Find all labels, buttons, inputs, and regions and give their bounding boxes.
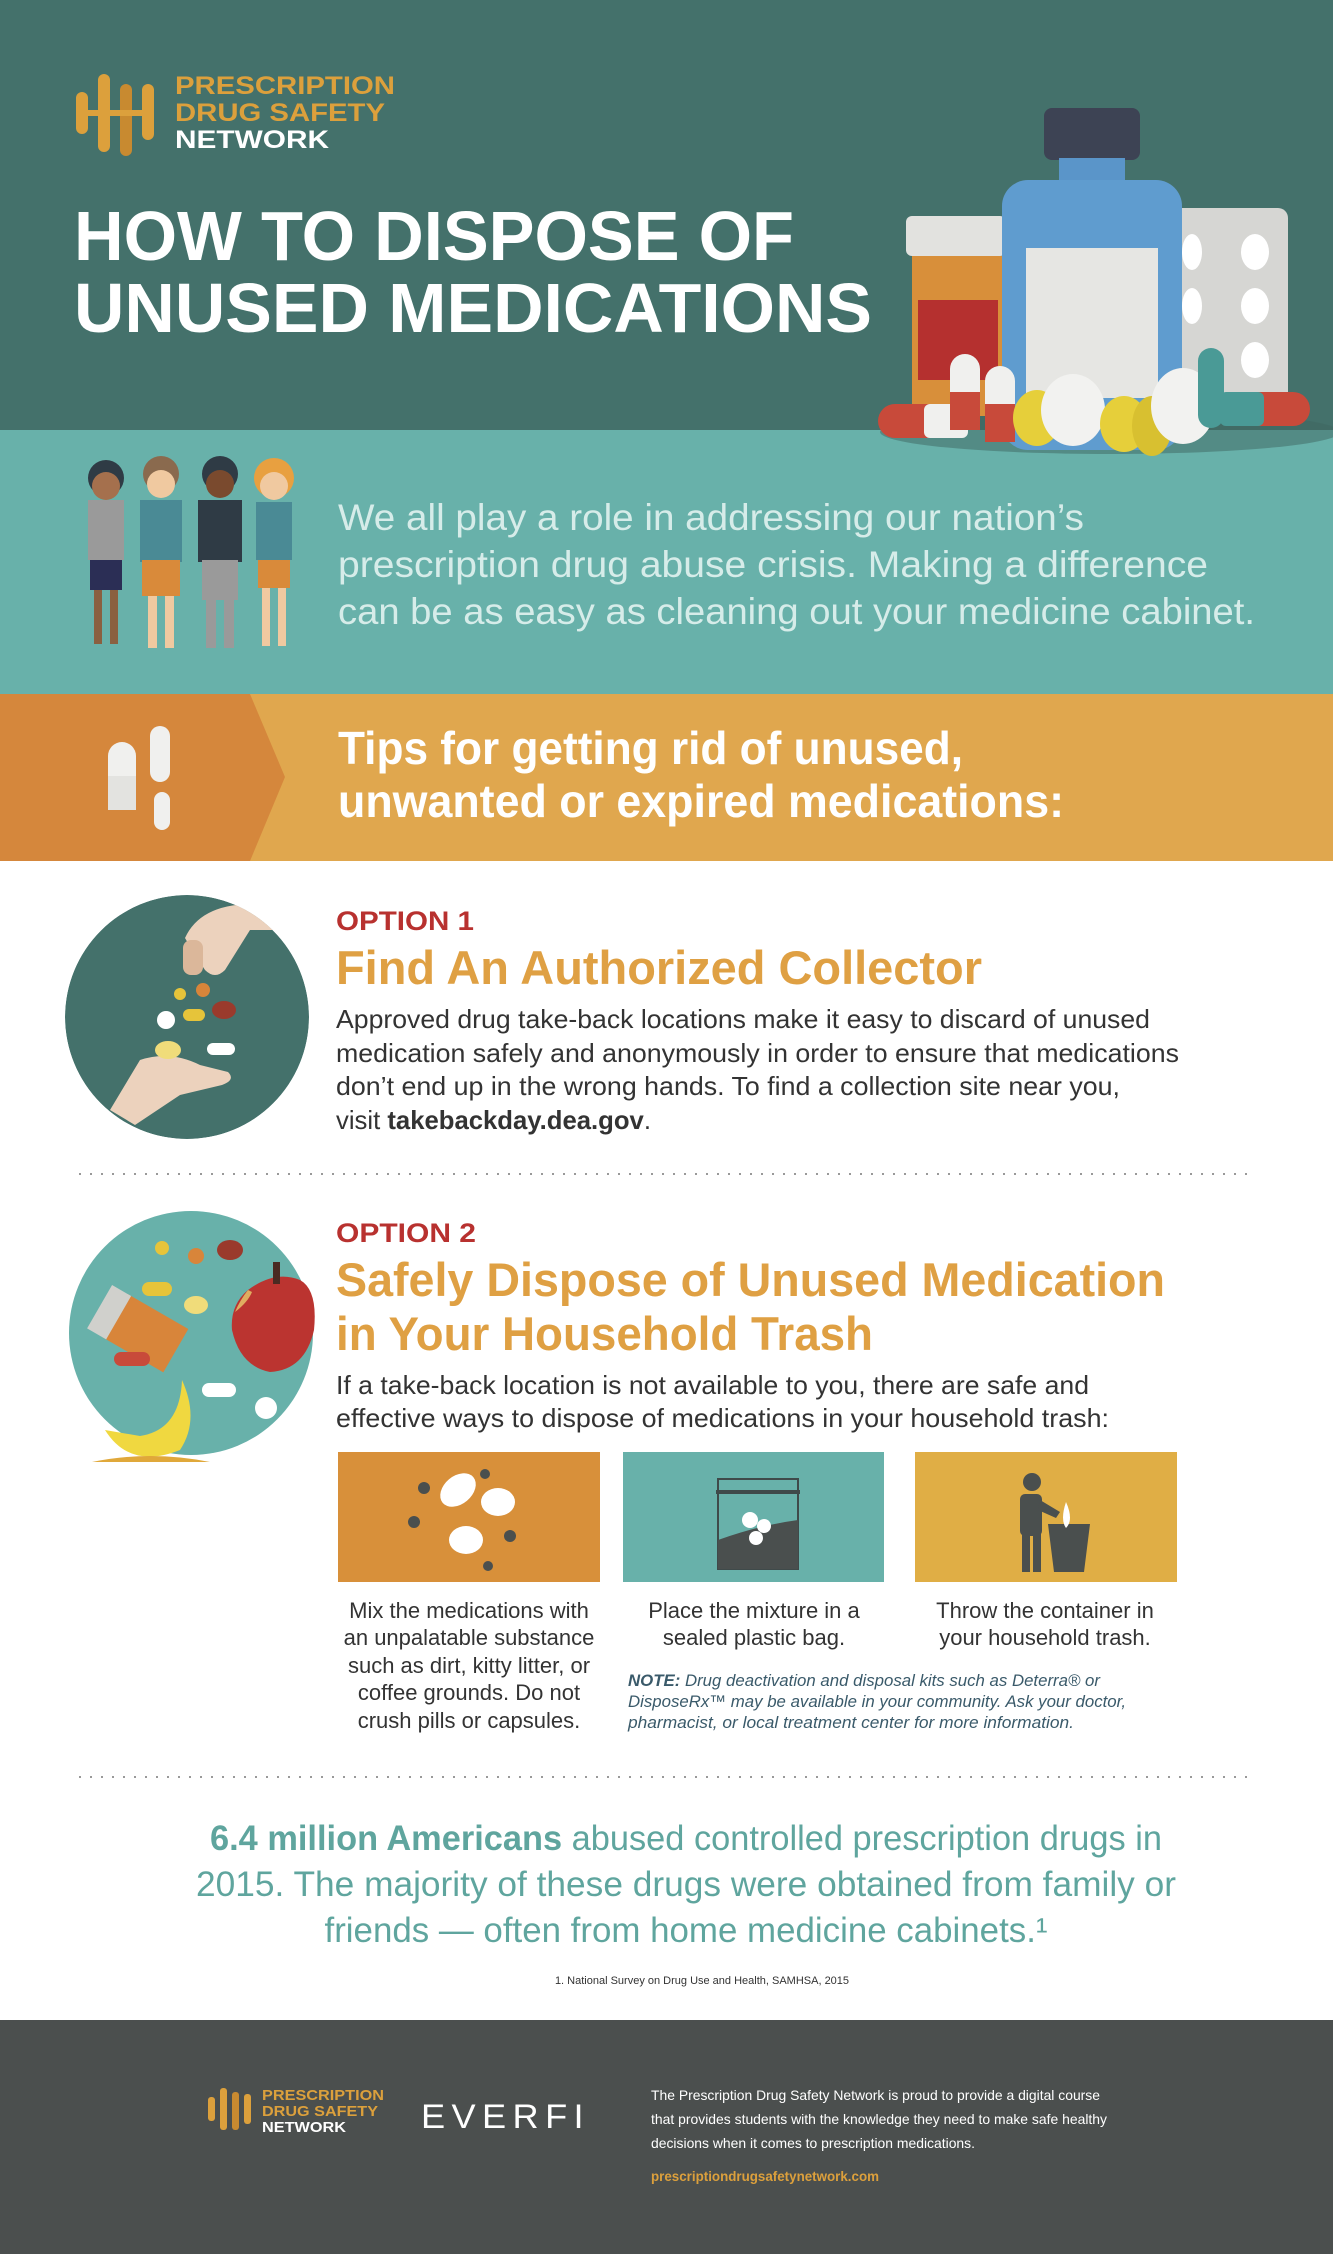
option 2 title: in Your Household Trash bbox=[336, 1307, 873, 1360]
statistic: 6.4 million Americans abused controlled prescription drugs in bbox=[210, 1819, 1162, 1858]
intro text: prescription drug abuse crisis. Making a difference bbox=[338, 544, 1208, 585]
footer logo: NETWORK bbox=[262, 2119, 346, 2136]
step 3: trash: Throw the container in bbox=[936, 1598, 1154, 1623]
title: HOW TO DISPOSE OF bbox=[74, 197, 794, 275]
option 1 body: medication safely and anonymously in order to ensure that medications bbox=[336, 1038, 1179, 1068]
icon: hands with pills bbox=[65, 895, 309, 1139]
option 1 body: don’t end up in the wrong hands. To find a collection site near you, bbox=[336, 1071, 1120, 1101]
step 1: mix: an unpalatable substance bbox=[344, 1625, 594, 1650]
logo: DRUG SAFETY bbox=[175, 99, 385, 127]
option 1 label: OPTION 1 bbox=[336, 906, 474, 936]
logo: NETWORK bbox=[175, 126, 329, 154]
note: NOTE: Drug deactivation and disposal kits such as Deterra® or bbox=[628, 1671, 1101, 1690]
option 1 title: Find An Authorized Collector bbox=[336, 941, 982, 994]
note: pharmacist, or local treatment center for more information. bbox=[627, 1713, 1074, 1732]
logo: PRESCRIPTION bbox=[175, 72, 395, 100]
option 1 body bbox=[336, 1004, 1179, 1135]
logo bbox=[76, 72, 395, 156]
step 1: mix: Mix the medications with bbox=[349, 1598, 589, 1623]
note bbox=[627, 1671, 1126, 1732]
option 2 body: effective ways to dispose of medications in your household trash: bbox=[336, 1403, 1109, 1433]
footer text: that provides students with the knowledge they need to make safe healthy bbox=[651, 2111, 1107, 2127]
footer logo: PRESCRIPTION bbox=[262, 2087, 384, 2104]
icon: trash items bbox=[69, 1211, 315, 1462]
statistic bbox=[196, 1819, 1176, 1950]
option 1 body: visit takebackday.dea.gov. bbox=[336, 1105, 651, 1135]
EVERFI logo: EVERFI bbox=[421, 2098, 590, 2136]
step 2: bag bbox=[623, 1452, 884, 1650]
tips heading: unwanted or expired medications: bbox=[338, 775, 1064, 827]
step 1: mix: crush pills or capsules. bbox=[358, 1708, 580, 1733]
note: DisposeRx™ may be available in your community. Ask your doctor, bbox=[628, 1692, 1126, 1711]
tips banner bbox=[0, 694, 1333, 861]
option 1 bbox=[65, 895, 1179, 1139]
tips heading bbox=[338, 722, 1064, 827]
footer bbox=[0, 2020, 1333, 2254]
statistic: 2015. The majority of these drugs were obtained from family or bbox=[196, 1865, 1176, 1904]
illustration: medications bbox=[878, 108, 1333, 456]
step 2: bag: sealed plastic bag. bbox=[663, 1625, 845, 1650]
footer text bbox=[651, 2087, 1107, 2184]
header panel bbox=[0, 0, 1333, 430]
footnote: 1. National Survey on Drug Use and Health, SAMHSA, 2015 bbox=[555, 1975, 849, 1987]
footer logo bbox=[208, 2087, 384, 2136]
option 2 body: If a take-back location is not available to you, there are safe and bbox=[336, 1370, 1089, 1400]
footer logo: DRUG SAFETY bbox=[262, 2103, 378, 2120]
step 2: bag: Place the mixture in a bbox=[648, 1598, 861, 1623]
illustration: people bbox=[88, 456, 294, 648]
footer text: prescriptiondrugsafetynetwork.com bbox=[651, 2168, 879, 2184]
step 3: trash: your household trash. bbox=[939, 1625, 1151, 1650]
step 3: trash bbox=[915, 1452, 1177, 1650]
step 1: mix: coffee grounds. Do not bbox=[358, 1680, 580, 1705]
title: UNUSED MEDICATIONS bbox=[74, 269, 872, 347]
intro text: can be as easy as cleaning out your medicine cabinet. bbox=[338, 591, 1255, 632]
footer text: The Prescription Drug Safety Network is proud to provide a digital course bbox=[651, 2087, 1100, 2103]
option 2 label: OPTION 2 bbox=[336, 1218, 476, 1248]
statistic: friends — often from home medicine cabinets.¹ bbox=[324, 1911, 1048, 1950]
option 2 title: Safely Dispose of Unused Medication bbox=[336, 1253, 1165, 1306]
intro text: We all play a role in addressing our nation’s bbox=[338, 497, 1084, 538]
footer text: decisions when it comes to prescription medications. bbox=[651, 2135, 975, 2151]
option 2 title bbox=[336, 1253, 1165, 1360]
step 1: mix: such as dirt, kitty litter, or bbox=[348, 1653, 590, 1678]
option 2 bbox=[69, 1211, 1177, 1733]
intro text bbox=[338, 497, 1255, 632]
option 1 body: Approved drug take-back locations make it easy to discard of unused bbox=[336, 1004, 1150, 1034]
tips heading: Tips for getting rid of unused, bbox=[338, 722, 963, 774]
icon: pills bbox=[108, 726, 170, 830]
step 1: mix bbox=[338, 1452, 600, 1733]
option 2 body bbox=[336, 1370, 1109, 1433]
intro band bbox=[0, 430, 1333, 694]
title bbox=[74, 197, 872, 347]
